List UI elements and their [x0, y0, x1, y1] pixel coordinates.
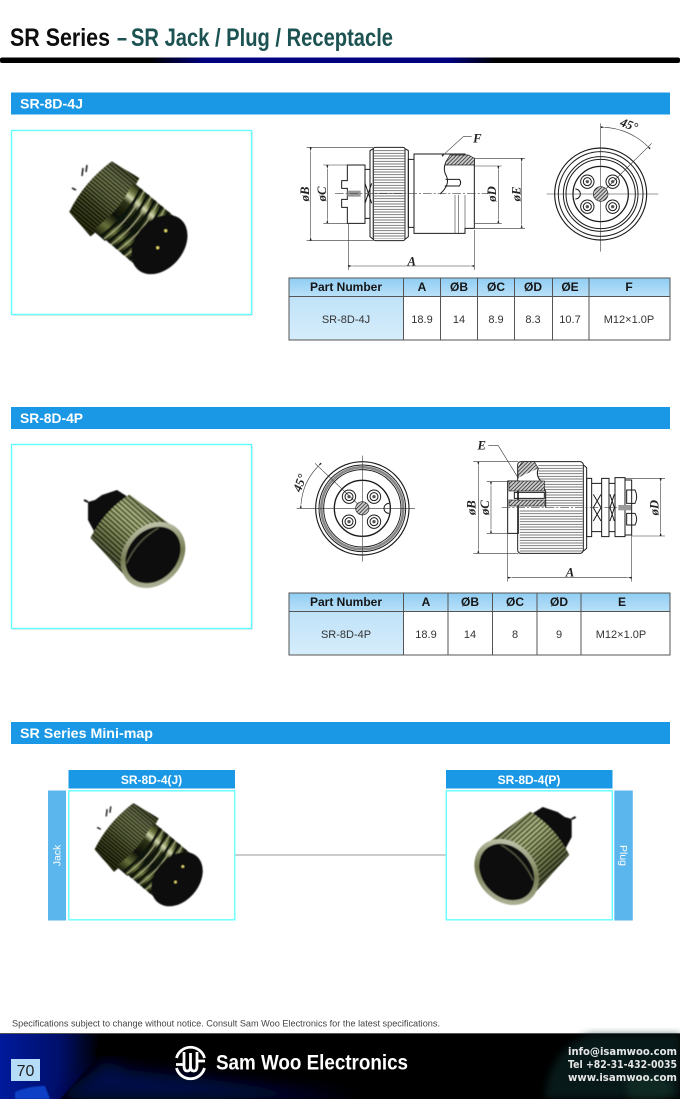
contacts — [342, 490, 389, 528]
rear terminals — [342, 165, 372, 223]
rear terminals — [587, 478, 637, 537]
mini-map: jack — [48, 770, 235, 920]
spec table: SR-8D-4J: SR-8D-4J — [322, 314, 370, 326]
spec table: SR-8D-4P: ØC — [506, 595, 524, 609]
footnote: Specifications subject to change without notice. Consult Sam Woo Electronics for the latest specifications. — [12, 1018, 440, 1028]
dimension labels: øD — [485, 186, 499, 203]
mini-map connector line — [235, 854, 446, 856]
dimension labels: øB — [465, 500, 479, 516]
spec table: SR-8D-4P: Part Number — [310, 595, 382, 609]
page number — [11, 1059, 40, 1081]
section header: SR-8D-4J — [11, 92, 670, 114]
knurled shell — [518, 462, 587, 553]
spec table: SR-8D-4J: ØE — [561, 280, 579, 294]
contact details: www.isamwoo.com — [568, 1072, 677, 1084]
spec table: SR-8D-4J: 14 — [453, 314, 465, 326]
footer band — [0, 1033, 680, 1099]
spec table: SR-8D-4J: ØC — [487, 280, 505, 294]
mini-map: plug — [446, 770, 633, 920]
spec table: SR-8D-4P: ØB — [461, 595, 479, 609]
threaded barrel — [408, 154, 474, 233]
heading: SR-8D-4(P): SR-8D-4(P) — [498, 773, 560, 787]
angle dimension — [301, 466, 318, 504]
spec table: SR-8D-4P: A — [422, 595, 431, 609]
company name: Sam Woo Electronics — [216, 1052, 408, 1074]
technical drawing: SR-8D-4J side view — [298, 132, 525, 270]
contact details: info@isamwoo.com — [568, 1046, 677, 1058]
dimension labels: øE — [510, 187, 524, 202]
centre line — [335, 193, 490, 195]
side tab: Jack — [48, 790, 66, 920]
photo: jack connector — [69, 791, 235, 920]
dimension lines — [473, 446, 665, 582]
spec table: SR-8D-4J: M12×1.0P — [604, 314, 654, 326]
spec table: SR-8D-4J: A — [418, 280, 427, 294]
technical drawing: SR-8D-4J front view — [547, 115, 658, 252]
spec table: SR-8D-4J: ØD — [524, 280, 542, 294]
spec table: SR-8D-4J — [289, 278, 670, 340]
spec table: SR-8D-4P: 9 — [556, 629, 562, 641]
contacts — [575, 175, 619, 213]
section header: SR Series Mini-map — [11, 722, 670, 744]
spec table: SR-8D-4J: 10.7 — [559, 314, 581, 326]
centre line — [502, 507, 618, 509]
title rule — [0, 58, 680, 63]
photo panel: SR-8D-4P connector — [12, 444, 252, 630]
heading: SR-8D-4(J): SR-8D-4(J) — [121, 773, 182, 787]
side tab: Plug: Plug — [617, 845, 629, 866]
spec table: SR-8D-4J: F — [625, 280, 633, 294]
title: SR Jack / Plug / Receptacle — [131, 24, 393, 52]
dimension labels: F — [472, 132, 482, 146]
photo: plug connector — [446, 791, 612, 920]
spec table: SR-8D-4J: Part Number — [310, 280, 382, 294]
spec table: SR-8D-4P: E — [618, 595, 626, 609]
angle dimension — [605, 127, 647, 146]
spec table: SR-8D-4P — [289, 593, 670, 655]
spec table: SR-8D-4J: 18.9 — [411, 314, 433, 326]
title: SR Series — [10, 24, 110, 52]
section header: SR Series Mini-map: SR Series Mini-map — [20, 725, 153, 741]
spec table: SR-8D-4P: SR-8D-4P — [321, 629, 371, 641]
angle label: 45° — [290, 472, 310, 495]
dimension labels: A — [565, 565, 574, 579]
spec table: SR-8D-4P: ØD — [550, 595, 568, 609]
section header: SR-8D-4J: SR-8D-4J — [20, 96, 83, 112]
technical drawing: SR-8D-4P front view — [290, 456, 415, 562]
angle label: 45° — [617, 115, 640, 135]
dimension labels: øC — [315, 186, 329, 202]
dimension labels: E — [476, 439, 486, 453]
logo: Sam Woo emblem — [176, 1047, 205, 1079]
contact details — [568, 1046, 677, 1084]
side tab: Plug — [614, 790, 633, 920]
dimension labels: øC — [478, 500, 492, 516]
photo panel: SR-8D-4J connector — [12, 130, 252, 316]
spec table: SR-8D-4P: 18.9 — [415, 629, 437, 641]
spec table: SR-8D-4P: 14 — [464, 629, 476, 641]
dimension labels: øD — [647, 500, 661, 516]
spec table: SR-8D-4J: ØB — [450, 280, 468, 294]
front insert — [508, 481, 544, 533]
knurled nut — [370, 147, 408, 241]
spec table: SR-8D-4P: M12×1.0P — [596, 629, 646, 641]
heading: SR-8D-4(P) — [446, 770, 612, 788]
dimension labels — [465, 439, 661, 579]
dimension labels: A — [406, 254, 416, 268]
side tab: Jack: Jack — [52, 844, 64, 866]
technical drawing: SR-8D-4P side view — [465, 439, 665, 582]
title — [10, 24, 393, 52]
heading: SR-8D-4(J) — [68, 770, 235, 788]
section header: SR-8D-4P — [11, 407, 670, 429]
page number: 70 — [17, 1063, 34, 1080]
spec table: SR-8D-4J: 8.3 — [525, 314, 541, 326]
spec table: SR-8D-4J: 8.9 — [488, 314, 504, 326]
spec table: SR-8D-4P: 8 — [512, 629, 518, 641]
title: – — [117, 24, 127, 52]
dimension labels: øB — [298, 187, 312, 202]
section header: SR-8D-4P: SR-8D-4P — [20, 410, 83, 426]
dimension lines — [307, 137, 525, 270]
dimension labels — [298, 132, 524, 268]
